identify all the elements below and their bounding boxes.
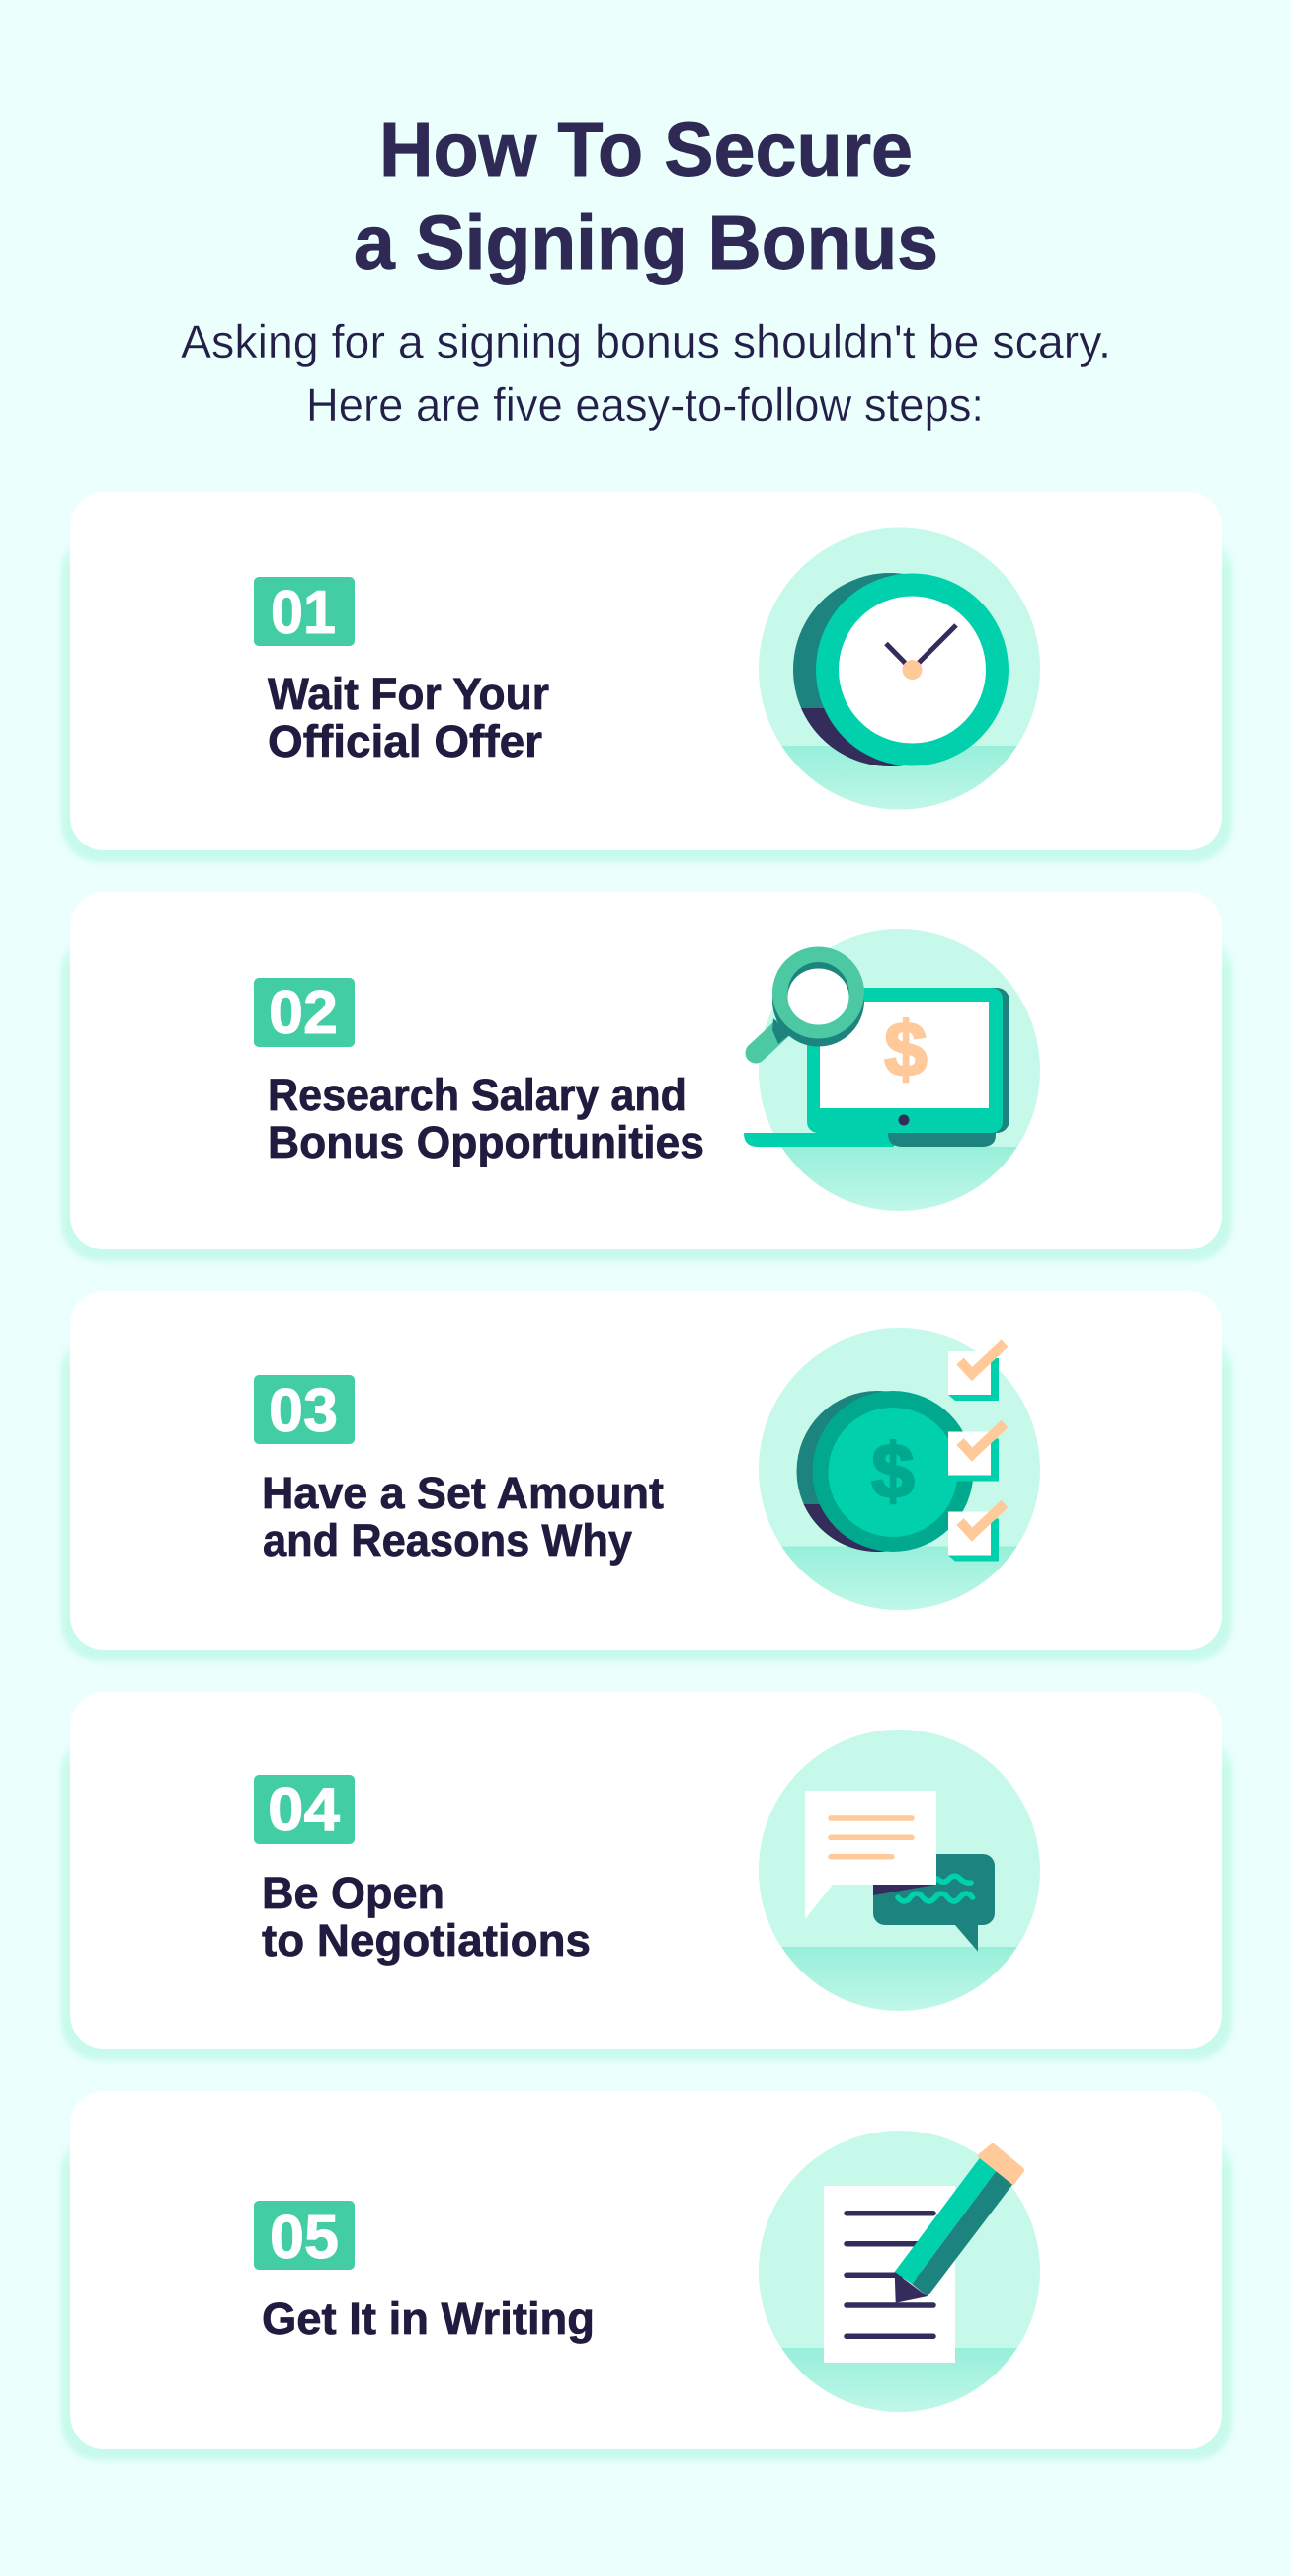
badge 02: 02	[269, 979, 338, 1047]
panel: step 2	[61, 892, 1232, 1261]
subtitle: Here are five easy-to-follow steps:	[306, 378, 984, 431]
title	[354, 108, 938, 285]
heading: step 2	[268, 1070, 704, 1167]
panel: step 5	[61, 2091, 1232, 2460]
heading: step 5: Get It in Writing	[262, 2294, 595, 2344]
heading: step 4: Be Open	[262, 1868, 444, 1918]
panel: step 3	[61, 1291, 1232, 1661]
title: How To Secure	[379, 108, 913, 193]
icon: speech bubbles	[759, 1730, 1040, 2011]
badge 01: 01	[271, 579, 336, 647]
title: a Signing Bonus	[354, 201, 938, 285]
icon: laptop and magnifier: $	[884, 1006, 928, 1092]
heading: step 2: Research Salary and	[268, 1070, 686, 1120]
badge 03: 03	[269, 1377, 338, 1445]
checkbox 1	[948, 1343, 1005, 1401]
badge 04	[254, 1775, 355, 1844]
heading: step 1: Wait For Your	[268, 669, 549, 719]
panel: step 1	[61, 492, 1232, 862]
badge 04: 04	[268, 1776, 341, 1844]
checkbox 3	[948, 1503, 1005, 1561]
badge 02	[254, 978, 355, 1047]
heading: step 3: Have a Set Amount	[262, 1468, 664, 1518]
panel: step 4	[61, 1692, 1232, 2060]
heading: step 4: to Negotiations	[262, 1915, 591, 1966]
icon: coin and checklist: $	[871, 1427, 915, 1514]
icon: clock	[759, 527, 1040, 810]
heading: step 3	[262, 1468, 664, 1566]
badge 03	[254, 1375, 355, 1445]
subtitle: Asking for a signing bonus shouldn't be scary.	[181, 315, 1111, 367]
icon: coin and checklist	[759, 1328, 1040, 1610]
heading: step 1: Official Offer	[268, 716, 542, 766]
icon: laptop and magnifier	[744, 929, 1040, 1211]
icon: pencil and document	[759, 2131, 1040, 2412]
checkbox 2	[948, 1424, 1005, 1482]
badge 05	[254, 2201, 355, 2272]
heading: step 2: Bonus Opportunities	[268, 1117, 704, 1167]
badge 01	[254, 577, 355, 647]
badge 05: 05	[270, 2204, 339, 2272]
subtitle	[181, 315, 1111, 431]
heading: step 1	[268, 669, 549, 766]
heading: step 3: and Reasons Why	[263, 1515, 632, 1566]
heading: step 4	[262, 1868, 591, 1966]
